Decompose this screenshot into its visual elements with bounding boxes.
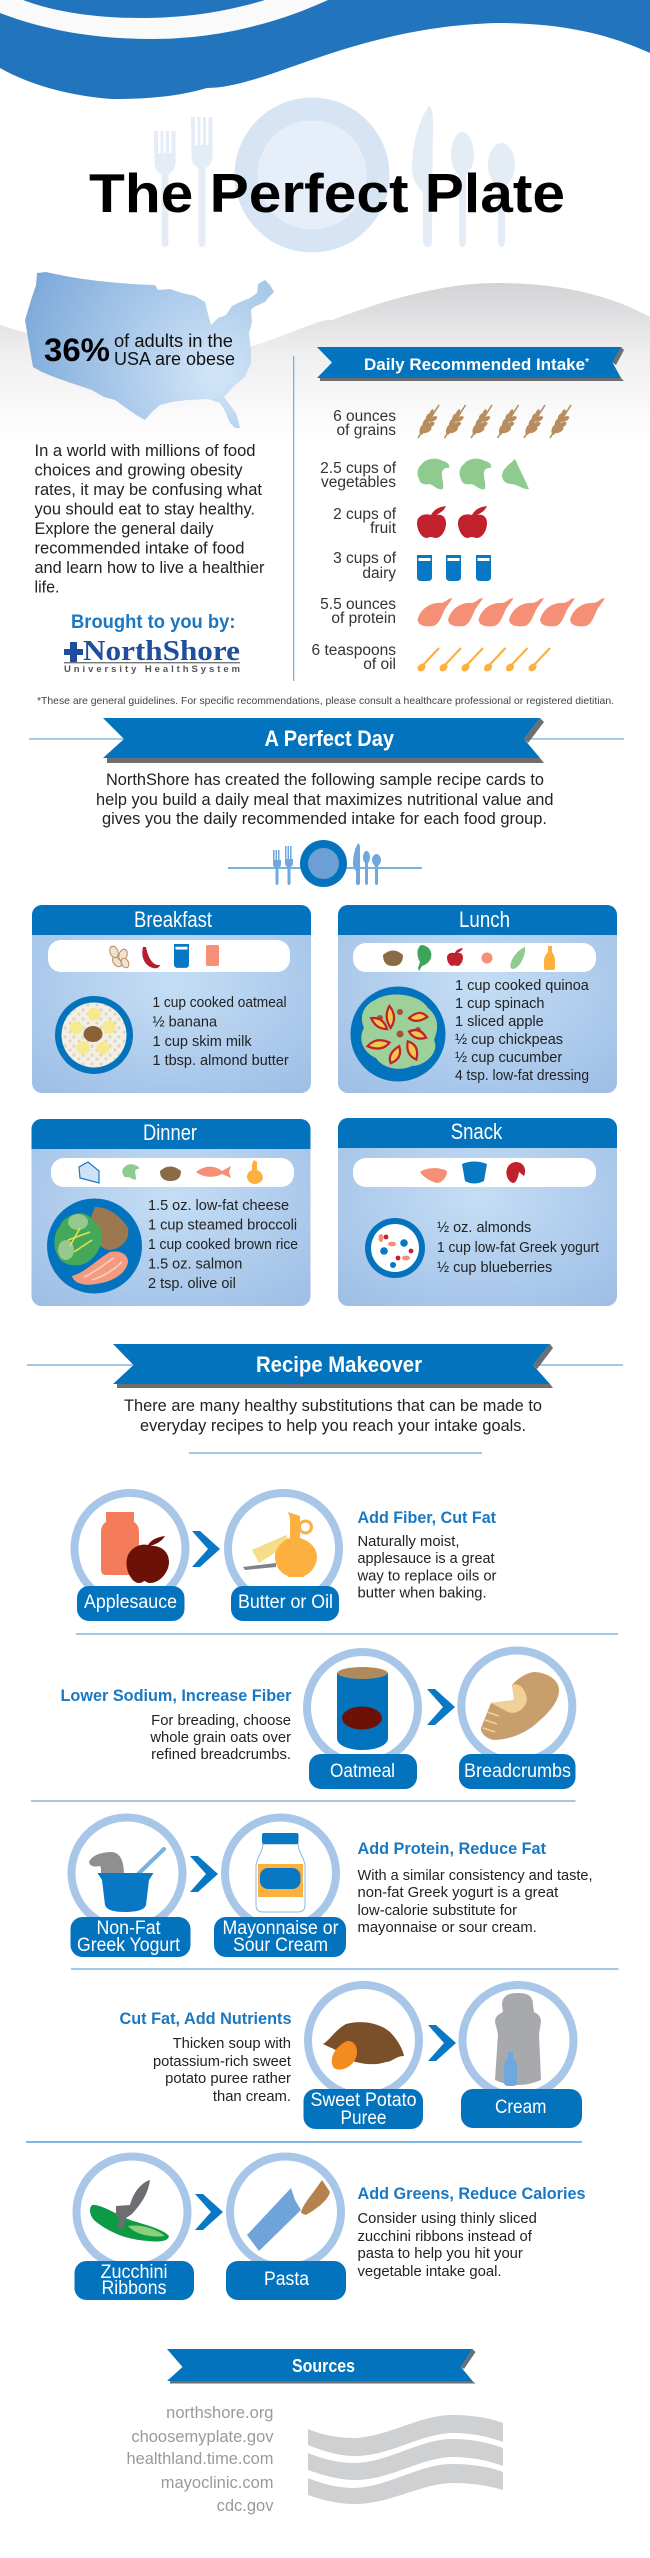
mayonnaise icon (225, 1818, 336, 1928)
text block (356, 1508, 497, 1602)
ingredient icons (353, 1158, 596, 1187)
label: oatmeal (309, 1754, 417, 1789)
arrow (190, 1856, 218, 1892)
ingredient icons (48, 940, 290, 972)
label: zucchini ribbons: Zucchini (100, 2262, 168, 2283)
label: non-fat greek yogurt (70, 1917, 190, 1957)
banner: sources: Sources (292, 2356, 355, 2376)
ingredient list (152, 995, 289, 1069)
intake: oil (312, 642, 550, 673)
ingredient list: 1 cup cooked oatmeal (152, 995, 286, 1011)
intake: dairy: 3 cups of (333, 550, 397, 567)
ingredient list: 1 sliced apple (455, 1014, 544, 1030)
text block: Add Protein, Reduce Fat (358, 1839, 546, 1858)
perfect day intro: gives you the daily recommended intake for each food group. (102, 809, 547, 828)
butter or oil icon (228, 1493, 339, 1604)
label: pasta: Pasta (264, 2269, 309, 2290)
label: breadcrumbs: Breadcrumbs (464, 1761, 571, 1782)
title: The Perfect Plate (89, 162, 565, 224)
yogurt plate (365, 1218, 425, 1278)
intro paragraph: choices and growing obesity (34, 462, 243, 480)
ingredient list: 1.5 oz. salmon (148, 1256, 242, 1272)
label: non-fat greek yogurt: Non-Fat (96, 1918, 161, 1939)
label: pasta (226, 2261, 346, 2300)
fork left (154, 131, 176, 247)
footnote: *These are general guidelines. For specific recommendations, please consult a healthcare professional or registered dietitian. (37, 695, 614, 707)
intake: oil: of oil (363, 656, 396, 673)
card: snack: Snack (451, 1119, 503, 1144)
text block: Thicken soup with (173, 2036, 291, 2052)
recipe makeover intro (124, 1396, 542, 1435)
swap: sweet potato puree for cream (120, 1985, 582, 2129)
plate (234, 98, 390, 252)
applesauce icon (74, 1493, 186, 1604)
intake: vegetables: vegetables (321, 474, 396, 491)
text block (60, 1686, 292, 1763)
text block: Add Fiber, Cut Fat (358, 1508, 496, 1527)
label: mayonnaise or sour cream (214, 1917, 346, 1957)
sources list: healthland.time.com (126, 2450, 274, 2468)
intro paragraph: recommended intake of food (34, 540, 244, 558)
intake: protein (320, 596, 605, 627)
ingredient list: ½ oz. almonds (437, 1220, 531, 1236)
intro paragraph: Explore the general daily (34, 520, 214, 538)
perfect day intro: help you build a daily meal that maximizes nutritional value and (96, 790, 554, 809)
oatmeal icon (307, 1652, 418, 1763)
intake: dairy (333, 550, 491, 582)
intake: protein: 5.5 ounces (320, 596, 396, 613)
small place setting icon (228, 840, 422, 887)
label: butter or oil: Butter or Oil (238, 1592, 333, 1613)
zucchini icon (76, 2156, 188, 2268)
statistic: 36% obese: 36% (44, 332, 110, 368)
text block: zucchini ribbons instead of (358, 2229, 533, 2245)
intake: fruit: fruit (370, 520, 397, 537)
spoon small (451, 132, 474, 247)
ingredient list: ½ cup blueberries (437, 1260, 552, 1276)
statistic: 36% obese: USA are obese (114, 349, 235, 369)
swap: zucchini ribbons for pasta (74, 2156, 586, 2300)
text block: non-fat Greek yogurt is a great (358, 1885, 558, 1901)
text block (358, 2184, 586, 2280)
cream icon (462, 1985, 574, 2096)
intake: grains (333, 405, 571, 439)
text block: potassium-rich sweet (153, 2054, 291, 2070)
text block: For breading, choose (151, 1713, 291, 1729)
banner: daily recommended intake: Daily Recommended Intake (364, 355, 585, 374)
vertical divider (293, 356, 294, 681)
NorthShore logo: NorthShore (83, 636, 240, 667)
watermark place setting (154, 98, 515, 252)
ingredient list: 4 tsp. low-fat dressing (455, 1068, 589, 1084)
statistic: 36% obese: of adults in the (114, 331, 233, 351)
text block: way to replace oils or (356, 1568, 497, 1584)
card: breakfast (32, 905, 311, 1093)
banner: daily recommended intake: * (585, 357, 589, 368)
ingredient list: 1 cup low-fat Greek yogurt (437, 1240, 599, 1256)
arrow (427, 1689, 455, 1725)
NorthShore logo: University HealthSystem (64, 664, 240, 675)
brought to you by: Brought to you by: (71, 612, 236, 633)
banner: sources (167, 2349, 476, 2384)
card: lunch (338, 905, 617, 1093)
label: cream (461, 2089, 582, 2128)
yogurt icon (72, 1818, 182, 1928)
label: zucchini ribbons: Ribbons (102, 2278, 166, 2299)
intake: oil: 6 teaspoons (312, 642, 396, 659)
label: sweet potato puree: Puree (340, 2108, 386, 2129)
ingredient list (437, 1220, 599, 1276)
swap: oatmeal for breadcrumbs (60, 1650, 576, 1789)
knife (412, 106, 433, 247)
banner: a perfect day (29, 718, 624, 763)
arrow (428, 2025, 456, 2061)
ingredient icons (51, 1158, 294, 1187)
statistic: 36% obese (44, 331, 235, 369)
label: mayonnaise or sour cream: Sour Cream (233, 1935, 328, 1956)
banner: a perfect day: A Perfect Day (264, 726, 395, 751)
perfect day intro (96, 770, 554, 828)
ingredient list: 2 tsp. olive oil (148, 1276, 236, 1292)
text block: Lower Sodium, Increase Fiber (60, 1686, 292, 1705)
ingredient list: 1 cup skim milk (152, 1034, 252, 1050)
intake: fruit (333, 506, 487, 538)
perfect day intro: NorthShore has created the following sample recipe cards to (106, 770, 544, 789)
intake: dairy: dairy (362, 565, 396, 582)
intro paragraph: you should eat to stay healthy. (34, 500, 255, 518)
text block (120, 2009, 292, 2105)
text block: pasta to help you hit your (358, 2246, 523, 2262)
card: lunch: Lunch (459, 907, 510, 932)
intake: protein: of protein (331, 610, 396, 627)
intake: vegetables (320, 459, 529, 491)
banner: daily recommended intake (317, 347, 624, 381)
intro paragraph: In a world with millions of food (34, 442, 255, 460)
sources list: choosemyplate.gov (131, 2428, 274, 2446)
text block: Cut Fat, Add Nutrients (120, 2009, 292, 2028)
recipe makeover intro: There are many healthy substitutions that can be made to (124, 1396, 542, 1415)
text block: applesauce is a great (358, 1551, 494, 1567)
spoon large (488, 143, 515, 247)
intro paragraph (34, 442, 265, 596)
ingredient list: 1 tbsp. almond butter (152, 1053, 289, 1069)
text block: low-calorie substitute for (358, 1903, 517, 1919)
text block: mayonnaise or sour cream. (358, 1920, 537, 1936)
banner: recipe makeover (27, 1344, 623, 1388)
header wave (0, 0, 650, 99)
USA map (25, 272, 274, 428)
ingredient list: 1 cup cooked brown rice (148, 1237, 298, 1253)
ingredient list: 1 cup steamed broccoli (148, 1218, 297, 1234)
card: dinner: Dinner (143, 1120, 197, 1145)
label: non-fat greek yogurt: Greek Yogurt (77, 1935, 181, 1956)
sweet potato icon (308, 1985, 419, 2096)
decorative gray waves (308, 2415, 503, 2504)
text block: Naturally moist, (358, 1534, 459, 1550)
label: cream: Cream (495, 2097, 546, 2118)
gray swoosh background (0, 283, 650, 440)
text block: Consider using thinly sliced (358, 2211, 537, 2227)
salad plate (350, 986, 446, 1082)
sources list: northshore.org (166, 2404, 274, 2422)
banner: recipe makeover: Recipe Makeover (256, 1352, 422, 1377)
intro paragraph: and learn how to live a healthier (34, 559, 265, 577)
label: mayonnaise or sour cream: Mayonnaise or (222, 1918, 339, 1939)
breadcrumbs icon (461, 1650, 572, 1762)
intro paragraph: life. (34, 578, 60, 596)
label: zucchini ribbons (74, 2261, 194, 2300)
intake: fruit: 2 cups of (333, 506, 397, 523)
arrow (192, 1531, 220, 1567)
text block: whole grain oats over (149, 1730, 291, 1746)
swap: greek yogurt for mayonnaise or sour cream (70, 1818, 592, 1957)
text block: vegetable intake goal. (358, 2264, 501, 2280)
label: sweet potato puree (304, 2089, 423, 2129)
text block (358, 1839, 592, 1936)
card: snack (338, 1118, 617, 1306)
sources list (126, 2404, 274, 2515)
ingredient list (455, 978, 590, 1084)
text block: refined breadcrumbs. (151, 1747, 291, 1763)
ingredient list: 1 cup cooked quinoa (455, 978, 590, 994)
label: breadcrumbs (459, 1754, 576, 1789)
intake: vegetables: 2.5 cups of (320, 460, 397, 477)
intake: grains: 6 ounces (333, 408, 396, 425)
text block: butter when baking. (358, 1586, 487, 1602)
recipe makeover intro: everyday recipes to help you reach your intake goals. (140, 1416, 526, 1435)
text block: potato puree rather (165, 2071, 291, 2087)
fork right (191, 117, 212, 247)
ingredient list: ½ cup chickpeas (455, 1032, 563, 1048)
intro paragraph: rates, it may be confusing what (34, 481, 262, 499)
arrow (195, 2194, 223, 2230)
text block: Add Greens, Reduce Calories (358, 2184, 586, 2203)
card: breakfast: Breakfast (134, 907, 212, 932)
ingredient list: ½ cup cucumber (455, 1050, 562, 1066)
sources list: mayoclinic.com (161, 2474, 274, 2492)
dinner plate (47, 1198, 142, 1294)
text block: than cream. (213, 2089, 291, 2105)
label: applesauce: Applesauce (84, 1592, 177, 1613)
NorthShore logo (64, 636, 240, 675)
swap: applesauce for butter or oil (74, 1493, 497, 1621)
sources list: cdc.gov (217, 2497, 274, 2515)
card: dinner (32, 1119, 310, 1306)
label: applesauce (77, 1586, 184, 1621)
oatmeal plate (55, 996, 133, 1074)
text block: With a similar consistency and taste, (358, 1868, 592, 1884)
label: sweet potato puree: Sweet Potato (310, 2090, 416, 2111)
pasta icon (230, 2156, 341, 2268)
ingredient icons (353, 943, 596, 972)
intake: grains: of grains (337, 422, 396, 439)
label: oatmeal: Oatmeal (330, 1761, 395, 1782)
ingredient list: ½ banana (152, 1014, 218, 1030)
ingredient list: 1 cup spinach (455, 996, 544, 1012)
ingredient list (148, 1198, 298, 1292)
label: butter or oil (231, 1586, 339, 1621)
ingredient list: 1.5 oz. low-fat cheese (148, 1198, 289, 1214)
